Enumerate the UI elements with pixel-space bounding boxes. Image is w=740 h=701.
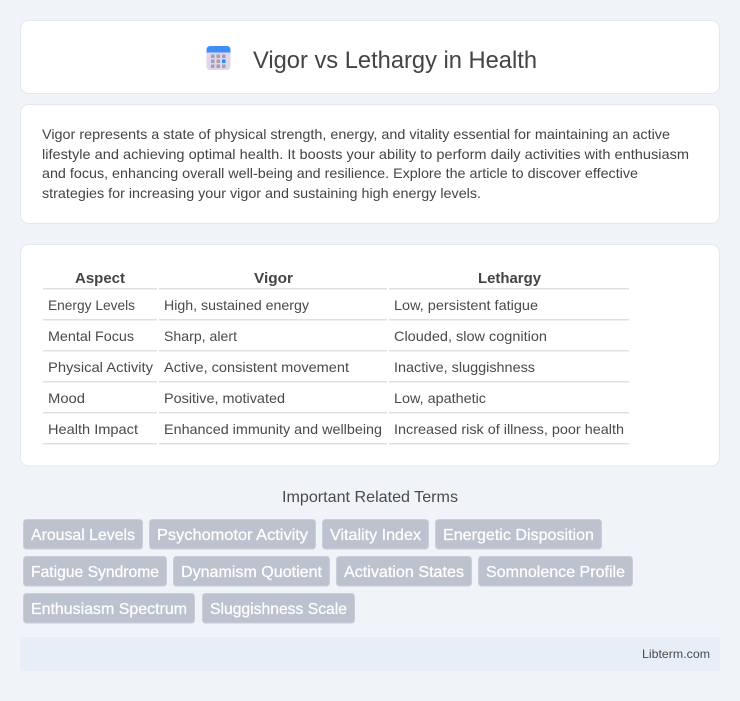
table row: mood: Mood [48,390,85,406]
tag: energetic disposition: Energetic Disposition [443,527,594,544]
table row: energy levels: Energy Levels [48,297,135,313]
table row: energy levels: Low, persistent fatigue [394,297,538,313]
text block: introduction: Vigor represents a state of physical strength, energy, and vitality essential for maintaining an active [42,126,670,142]
tag: enthusiasm spectrum: Enthusiasm Spectrum [31,601,187,618]
tag: psychomotor activity [150,520,316,549]
tag: somnolence profile: Somnolence Profile [486,564,625,581]
tag: enthusiasm spectrum [24,594,194,623]
tag: activation states: Activation States [344,564,464,581]
table row: mood: Low, apathetic [394,390,486,406]
footer: Libterm.com [642,647,710,661]
table header: Aspect [75,270,125,287]
table row: mental focus [48,328,547,344]
table row: health impact: Enhanced immunity and wellbeing [164,421,382,437]
tag: sluggishness scale: Sluggishness Scale [210,601,347,618]
table header: Lethargy [478,270,542,287]
tag: energetic disposition [436,520,602,549]
tag: dynamism quotient [174,556,330,586]
panel: introduction [20,104,720,224]
tag: fatigue syndrome: Fatigue Syndrome [31,564,159,581]
text block: introduction: and focus, enhancing overall well-being and resilience. Explore the article to discover effective [42,165,638,181]
table row: physical activity: Physical Activity [48,359,153,375]
table row: mental focus: Mental Focus [48,328,134,344]
panel: header [20,20,720,94]
text block: introduction: strategies for increasing your vigor and sustaining high energy levels. [42,185,481,201]
tag: arousal levels [24,520,142,549]
table row: mental focus: Clouded, slow cognition [394,328,547,344]
title: Vigor vs Lethargy in Health [253,47,537,74]
table row: mood [48,390,486,406]
tag: vitality index [322,520,428,549]
tag: activation states [336,556,472,586]
table row: health impact: Health Impact [48,421,138,437]
table row: physical activity: Inactive, sluggishness [394,359,535,375]
table row: energy levels: High, sustained energy [164,297,309,313]
tag: arousal levels: Arousal Levels [31,527,135,544]
table row: health impact [48,421,624,437]
table row: physical activity [48,359,535,375]
table row: physical activity: Active, consistent movement [164,359,349,375]
icon: calendar [206,46,230,70]
footer [20,637,720,671]
table row: health impact: Increased risk of illness, poor health [394,421,624,437]
tag: sluggishness scale [202,594,354,623]
table row: mental focus: Sharp, alert [164,328,237,344]
tag: somnolence profile [478,556,632,586]
tag: vitality index: Vitality Index [330,527,421,544]
text block: introduction: lifestyle and achieving optimal health. It boosts your ability to perform daily activities with enthusiasm [42,146,689,162]
tag: dynamism quotient: Dynamism Quotient [181,564,323,581]
table row: energy levels [48,297,538,313]
tag list: related terms [24,520,632,623]
table header: Vigor [254,270,293,287]
text block: introduction [42,126,689,201]
tag: psychomotor activity: Psychomotor Activity [157,527,308,544]
panel: comparison table [20,244,720,466]
table header [75,270,542,287]
table row: mood: Positive, motivated [164,390,285,406]
tag: fatigue syndrome [24,556,166,586]
heading: related terms: Important Related Terms [282,489,458,506]
